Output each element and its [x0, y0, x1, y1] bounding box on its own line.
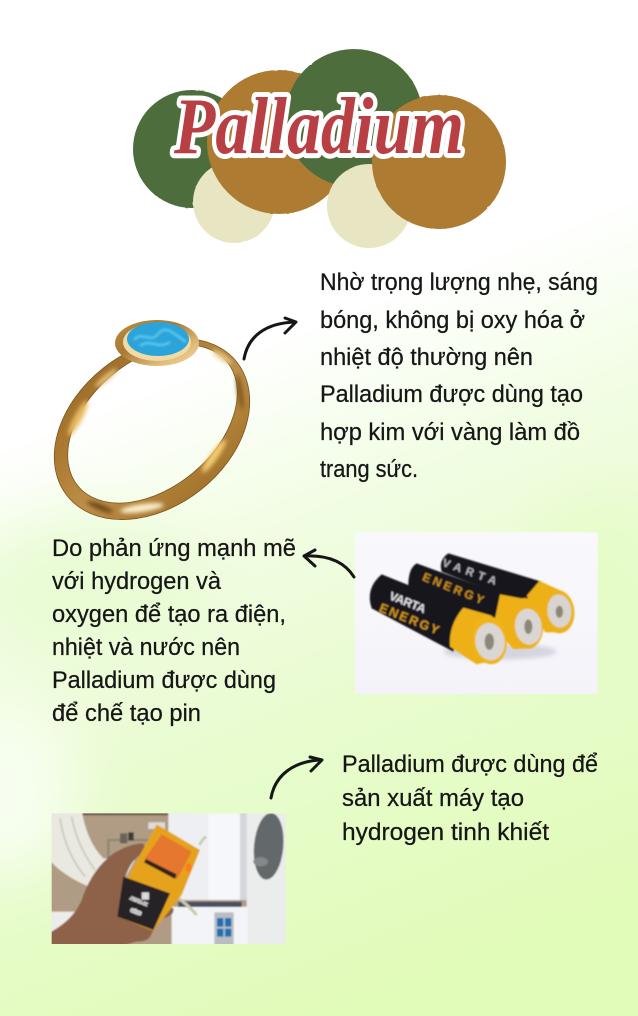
icon: gold ring with turquoise stone [54, 320, 250, 520]
ring band [54, 338, 250, 520]
pipe fittings [108, 840, 150, 860]
middle battery: ENERGY [421, 570, 486, 607]
text block: jewellery use: trang sức. [320, 456, 418, 483]
text block: battery use [52, 535, 296, 727]
duct [48, 810, 135, 887]
text block: jewellery use: hợp kim với vàng làm đồ [320, 419, 580, 446]
machine [168, 810, 210, 900]
text block: jewellery use: Nhờ trọng lượng nhẹ, sáng [320, 269, 598, 296]
control panel [214, 912, 234, 947]
photo: batteries [355, 532, 598, 694]
photo: hand holding gas detector: GASS [130, 908, 142, 916]
text block: hydrogen generator: Palladium được dùng để [342, 751, 598, 778]
text block: battery use: Do phản ứng mạnh mẽ [52, 535, 296, 562]
text block: battery use: với hydrogen và [52, 568, 221, 595]
text block: jewellery use: Palladium được dùng tạo [320, 381, 583, 408]
front battery: ENERGY [377, 601, 442, 638]
text block: battery use: oxygen để tạo ra điện, [52, 601, 286, 628]
labels [142, 892, 149, 900]
title: Palladium [133, 49, 506, 248]
text block: hydrogen generator: hydrogen tinh khiết [342, 819, 549, 846]
heading text: Palladium [173, 83, 464, 171]
text block: battery use: Palladium được dùng [52, 667, 276, 694]
shadow [443, 644, 557, 660]
white floor cabinet [52, 910, 76, 933]
text block: hydrogen generator [342, 751, 598, 846]
decorative circles [133, 49, 506, 248]
front battery: VARTA [387, 589, 428, 616]
hand [48, 843, 174, 947]
text block: jewellery use: nhiệt độ thường nên [320, 344, 533, 371]
text block: jewellery use: bóng, không bị oxy hóa ở [320, 307, 585, 334]
back battery [441, 553, 577, 635]
text block: battery use: nhiệt và nước nên [52, 634, 240, 661]
arrow: ring to text [244, 318, 296, 359]
bezel [115, 320, 199, 366]
arrow: batteries to text [304, 550, 354, 577]
text block: hydrogen generator: sản xuất máy tạo [342, 785, 524, 812]
detector body [117, 824, 200, 931]
arrow: to hydrogen text [271, 757, 322, 798]
middle battery [408, 563, 546, 650]
LED [186, 863, 192, 872]
front battery [370, 574, 510, 667]
stone [127, 322, 189, 356]
photo: hand holding gas detector: ALTAIR 4X [130, 896, 148, 907]
wall [52, 814, 248, 944]
text block: jewellery use [320, 269, 598, 483]
tube [176, 897, 197, 915]
detector screen [144, 834, 192, 879]
text block: battery use: để chế tạo pin [52, 700, 201, 727]
ring highlights [65, 348, 245, 515]
back battery: VARTA [441, 557, 498, 588]
photo: hand holding gas detector [48, 810, 289, 947]
